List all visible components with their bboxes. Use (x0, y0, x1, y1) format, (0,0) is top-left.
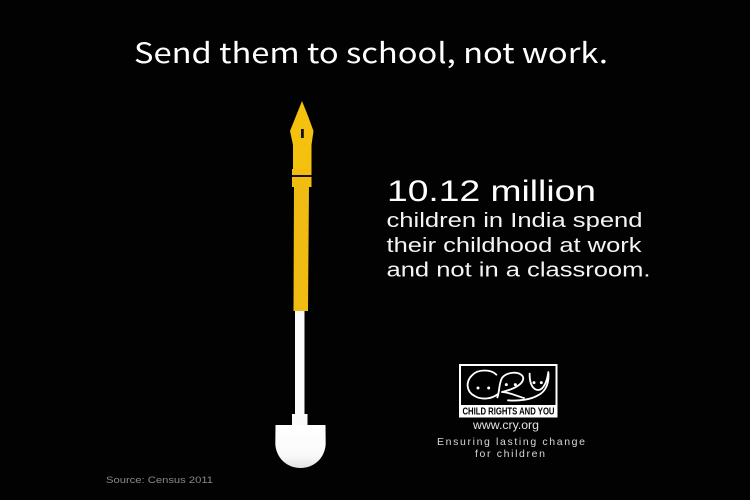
statistic description (386, 209, 650, 282)
logo frame (460, 365, 556, 416)
pen collar (292, 169, 312, 187)
statistic description: their childhood at work (386, 234, 642, 257)
statistic description: and not in a classroom. (386, 258, 650, 282)
logo banner text: CHILD RIGHTS AND YOU (462, 406, 554, 418)
shovel neck (292, 414, 308, 426)
white shovel handle (295, 311, 304, 415)
website: www.cry.org (472, 420, 539, 432)
tagline: for children (475, 448, 545, 460)
CRY hand-drawn faces (468, 370, 549, 401)
tagline: Ensuring lasting change (437, 436, 585, 448)
pen nib (290, 101, 314, 170)
shovel blade (275, 425, 326, 468)
source: Source: Census 2011 (106, 475, 213, 486)
statistic: 10.12 million: 10.12 million (387, 175, 596, 208)
yellow pen shaft (294, 186, 309, 311)
statistic description: children in India spend (386, 209, 642, 232)
CRY logo (460, 365, 556, 418)
logo banner (461, 405, 556, 416)
title: Send them to school, not work. (134, 32, 608, 72)
nib slit (301, 129, 304, 138)
icon: pen nib turning into a shovel (275, 101, 326, 468)
tagline (437, 436, 585, 460)
